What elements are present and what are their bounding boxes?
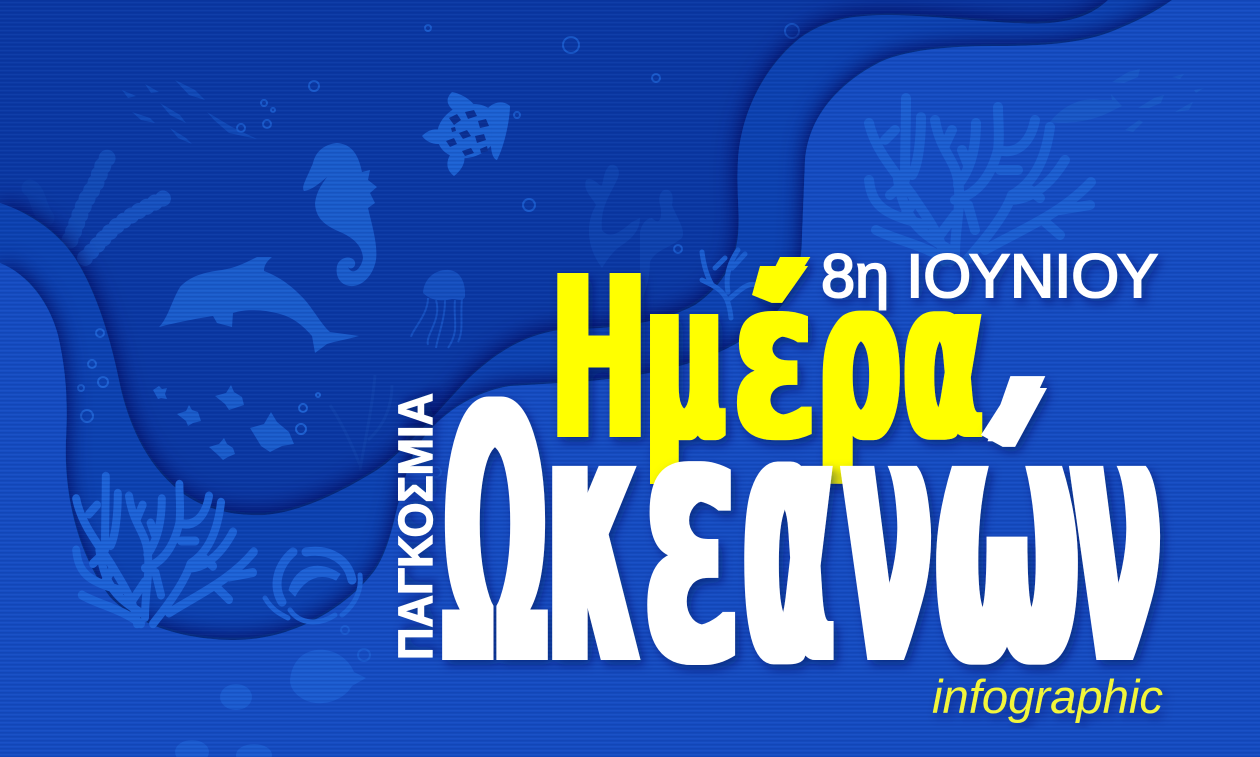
icon: bubbles upper area <box>237 24 1188 375</box>
icon: crab <box>265 551 360 622</box>
icon: coral upper right <box>869 98 1091 262</box>
icon: small coral <box>702 250 756 318</box>
heading: Παγκόσμια vertical: ΠΑΓΚΟΣΜΙΑ <box>390 393 443 660</box>
icon: top-left fish school <box>122 80 257 144</box>
heading: Ωκεανών: Ω <box>445 330 545 744</box>
icon: bubbles lower <box>341 372 707 661</box>
heading: 8η Ιουνίου: 8η ΙΟΥΝΙΟΥ <box>821 242 1158 310</box>
heading: Ημέρα: α <box>904 229 982 491</box>
icon: fish school upper right <box>1050 69 1204 132</box>
heading: Ωκεανών: κ <box>547 330 642 744</box>
heading: Ημέρα: Η <box>552 229 646 491</box>
icon: coral lower left <box>76 476 254 624</box>
icon: bubbles left <box>78 329 320 434</box>
icon: dolphin <box>159 257 359 353</box>
heading: Ωκεανών: ε <box>644 330 740 744</box>
icon: fish lower right <box>175 650 366 757</box>
heading: Ωκεανών <box>445 330 1160 744</box>
icon: jellyfish <box>411 270 465 348</box>
icon: turtle <box>422 92 510 176</box>
icon: deep seaweed <box>330 375 392 470</box>
icon: seaweed centre <box>585 165 683 302</box>
heading: Ημέρα: μ <box>646 229 724 491</box>
heading: Ωκεανών: ν <box>844 330 931 744</box>
heading: Ωκεανών: α <box>744 330 833 744</box>
heading: Ημέρα <box>552 229 982 491</box>
heading: Ημέρα: ρ <box>818 229 900 491</box>
heading: Ημέρα: έ <box>734 229 816 491</box>
heading: Ωκεανών: ώ <box>935 330 1079 744</box>
icon: seaweed left <box>30 152 170 258</box>
icon: small fish group <box>153 385 294 460</box>
icon: seahorse <box>303 143 377 286</box>
label: infographic: infographic <box>932 670 1163 723</box>
